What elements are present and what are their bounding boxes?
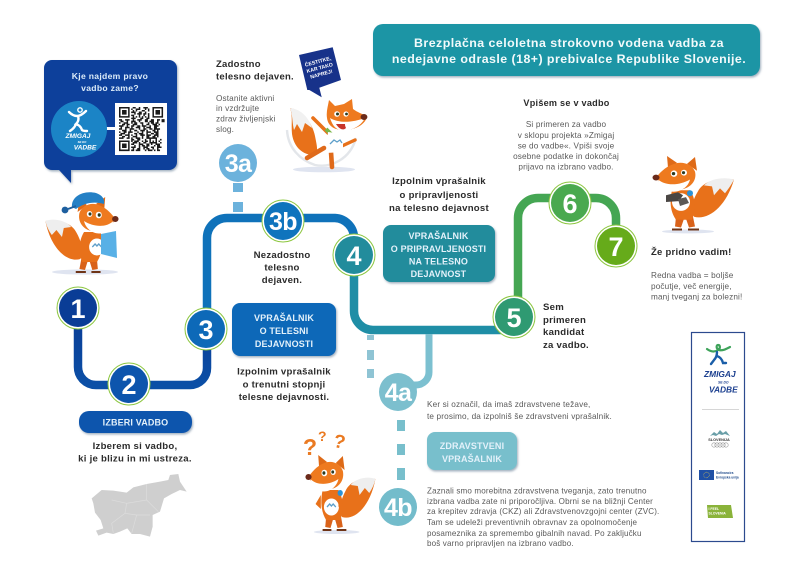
text: zaznali smo tveganja: Zaznali smo morebitna zdravstvena tveganja, zato trenutno xyxy=(427,486,647,496)
text: izberem si vadbo: Izberem si vadbo, xyxy=(93,441,177,452)
text: vpišem se v vadbo xyxy=(513,98,619,172)
step 3b xyxy=(262,200,304,242)
dashes: 4 to 4a xyxy=(367,335,374,378)
text: izpolnim vprašalnik o pripravljenosti: Izpolnim vprašalnik xyxy=(392,176,486,187)
step 4b xyxy=(379,488,417,526)
button: vprašalnik o telesni dejavnosti: DEJAVNOSTI xyxy=(255,339,313,349)
text: sem primeren kandidat: za vadbo. xyxy=(543,340,589,351)
dashes: 3a to 3b xyxy=(233,183,243,212)
text: zdravstvene težave: te prosimo, da izpolniš še zdravstveni vprašalnik. xyxy=(427,412,612,421)
step 3: 3 xyxy=(198,315,214,345)
text: vpišem se v vadbo: Si primeren za vadbo xyxy=(526,120,606,129)
button: zdravstveni vprašalnik: VPRAŠALNIK xyxy=(442,453,502,464)
button: vprašalnik o telesni dejavnosti: O TELESNI xyxy=(260,326,308,336)
text: vpišem se v vadbo: Vpišem se v vadbo xyxy=(523,98,610,108)
text: zaznali smo tveganja: posameznika za spremembo gibalnih navad. Po zaključku xyxy=(427,529,642,538)
step 2: 2 xyxy=(121,370,137,400)
speech bubble: where to find the exercise xyxy=(44,60,177,183)
connector: 5 line to 4a xyxy=(408,334,429,385)
question marks: ? xyxy=(318,428,327,444)
speech bubble: where to find the exercise: Kje najdem pravo xyxy=(72,71,148,81)
button: izberi vadbo: IZBERI VADBO xyxy=(103,418,168,428)
path: steps 5 to 7 xyxy=(518,198,616,317)
text: nezadostno telesno dejaven: dejaven. xyxy=(262,275,302,286)
text: sem primeren kandidat: kandidat xyxy=(543,327,585,338)
text: zaznali smo tveganja: za krepitev zdravja (CKZ) ali Zdravstvenovzgojni center (ZVC). xyxy=(427,507,659,516)
button: vprašalnik o pripravljenosti: DEJAVNOST xyxy=(411,269,467,279)
text: vpišem se v vadbo: osebne podatke in dokončaj xyxy=(513,152,619,161)
logo: Zmigaj se do vadbe xyxy=(703,345,738,394)
text: izpolnim vprašalnik o trenutni stopnji: o trenutni stopnji xyxy=(243,380,325,390)
text: nezadostno telesno dejaven: telesno xyxy=(264,262,300,274)
text: zaznali smo tveganja: boš varno pripravljen na izbrano vadbo. xyxy=(427,539,574,548)
path: steps 1 to 3 xyxy=(78,308,207,385)
step 3b: 3b xyxy=(269,208,297,236)
bubble: čestitke: NAPREJ! xyxy=(310,69,334,81)
text: izpolnim vprašalnik o pripravljenosti: o pripravljenosti xyxy=(400,190,478,201)
map of Slovenia xyxy=(92,474,187,537)
logo: EU co-funding: Sofinancira xyxy=(716,471,734,475)
text: zadostno telesno dejaven: Ostanite aktivni xyxy=(216,94,274,103)
logo: I feel Slovenia: I FEEL xyxy=(708,507,719,511)
logo: Zmigaj se do vadbe: ZMIGAJ xyxy=(703,369,736,379)
logo: Zmigaj se do vadbe: SE DO xyxy=(718,380,729,384)
path: steps 3 to 4 xyxy=(207,218,354,329)
step 5 xyxy=(493,296,535,338)
button: izberi vadbo xyxy=(79,411,192,433)
text: izpolnim vprašalnik o pripravljenosti: na telesno dejavnost xyxy=(389,203,489,214)
step 4b: 4b xyxy=(384,494,412,522)
text: vpišem se v vadbo: se do vadbe«. Vpiši svoje xyxy=(518,142,615,150)
question marks: ? xyxy=(303,434,317,460)
step 6: 6 xyxy=(562,189,578,219)
question marks xyxy=(303,428,347,460)
title banner xyxy=(373,24,760,76)
fox with cap and pillow xyxy=(45,192,119,275)
text: zaznali smo tveganja: izbrana vadba zate ni priporočljiva. Obrni se na bližnji Center xyxy=(427,497,653,506)
fox with binoculars xyxy=(652,156,734,233)
text: že pridno vadim: počutje, več energije, xyxy=(651,282,732,291)
logo: Slovenija Olympic committee: SLOVENIJA xyxy=(708,438,730,442)
button: vprašalnik o telesni dejavnosti xyxy=(232,303,336,356)
logo badge: Zmigaj se do vadbe: VADBE xyxy=(74,144,97,152)
QR code xyxy=(115,103,167,155)
text: zadostno telesno dejaven: Zadostno xyxy=(216,59,261,70)
button: vprašalnik o pripravljenosti: NA TELESNO xyxy=(409,256,468,266)
step 2 xyxy=(108,363,150,405)
speech bubble: where to find the exercise: vadbo zame? xyxy=(81,83,139,93)
step 3 xyxy=(185,308,227,350)
fox running with ribbon xyxy=(287,99,367,172)
text: že pridno vadim: manj tveganj za bolezni! xyxy=(651,292,742,302)
logo: EU co-funding xyxy=(699,470,739,480)
button: vprašalnik o pripravljenosti: O PRIPRAVLJENOSTI xyxy=(391,244,486,254)
button: vprašalnik o telesni dejavnosti: VPRAŠALNIK xyxy=(254,312,314,323)
text: sem primeren kandidat: primeren xyxy=(543,315,586,326)
step 4: 4 xyxy=(346,241,362,271)
logo panel xyxy=(692,332,744,542)
panel divider xyxy=(702,408,739,410)
button: vprašalnik o pripravljenosti xyxy=(383,225,495,282)
logo badge: Zmigaj se do vadbe xyxy=(51,101,107,157)
text: že pridno vadim xyxy=(651,246,742,302)
button: vprašalnik o pripravljenosti: VPRAŠALNIK xyxy=(408,230,469,241)
bubble: čestitke: KAR TAKO xyxy=(306,62,334,75)
button: zdravstveni vprašalnik: ZDRAVSTVENI xyxy=(440,441,504,451)
text: izberem si vadbo: ki je blizu in mi ustreza. xyxy=(78,454,192,464)
text: zadostno telesno dejaven: slog. xyxy=(216,125,234,134)
text: že pridno vadim: Že pridno vadim! xyxy=(651,246,732,258)
step 5: 5 xyxy=(506,303,522,333)
question marks: ? xyxy=(331,431,347,454)
title banner: nedejavne odrasle (18+) prebivalce Republike Slovenije. xyxy=(392,52,746,66)
text: vpišem se v vadbo: v sklopu projekta »Zmigaj xyxy=(518,131,614,140)
text: zdravstvene težave: Ker si označil, da imaš zdravstvene težave, xyxy=(427,400,590,409)
step 3a: 3a xyxy=(225,150,253,178)
logo badge: Zmigaj se do vadbe: ZMIGAJ xyxy=(65,133,91,140)
logo: Slovenija Olympic committee xyxy=(708,430,730,447)
bubble: čestitke: ČESTITKE, xyxy=(304,55,333,69)
step 4a: 4a xyxy=(385,379,413,407)
step 6 xyxy=(549,182,591,224)
logo: I feel Slovenia: SLOVENIA xyxy=(708,512,726,516)
step 4a xyxy=(379,373,417,411)
step 4 xyxy=(333,234,375,276)
text: izpolnim vprašalnik o trenutni stopnji: Izpolnim vprašalnik xyxy=(237,366,331,378)
button: zdravstveni vprašalnik xyxy=(427,432,517,470)
logo: Zmigaj se do vadbe: VADBE xyxy=(709,384,738,394)
text: zaznali smo tveganja: Tam se udeleži preventivnih obravnav za opolnomočenje xyxy=(427,518,638,527)
step 1 xyxy=(57,287,99,329)
step 7: 7 xyxy=(608,232,624,262)
text: nezadostno telesno dejaven: Nezadostno xyxy=(254,250,310,261)
step 3a xyxy=(219,144,257,182)
dashes: 4a to 4b xyxy=(397,420,405,480)
logo: EU co-funding: Evropska unija xyxy=(716,476,739,480)
title banner: Brezplačna celoletna strokovno vodena vadba za xyxy=(414,36,724,50)
text: zadostno telesno dejaven: in vzdržujte xyxy=(216,104,260,113)
fox with question marks xyxy=(305,455,375,534)
step 7 xyxy=(595,225,637,267)
logo badge: Zmigaj se do vadbe: SE DO xyxy=(78,140,87,144)
path: steps 4 to 5 xyxy=(354,255,513,330)
step 1: 1 xyxy=(70,294,86,324)
text: zadostno telesno dejaven: telesno dejaven. xyxy=(216,72,294,82)
text: izpolnim vprašalnik o trenutni stopnji: telesne dejavnosti. xyxy=(239,392,329,403)
logo: I feel Slovenia xyxy=(707,505,733,518)
text: zadostno telesno dejaven: zdrav življenjski xyxy=(216,114,275,124)
text: že pridno vadim: Redna vadba = boljše xyxy=(651,271,734,280)
text: sem primeren kandidat: Sem xyxy=(543,302,564,313)
text: vpišem se v vadbo: prijavo na izbrano vadbo. xyxy=(518,162,614,172)
text: zadostno telesno dejaven xyxy=(216,59,294,134)
bubble: čestitke xyxy=(299,47,341,97)
